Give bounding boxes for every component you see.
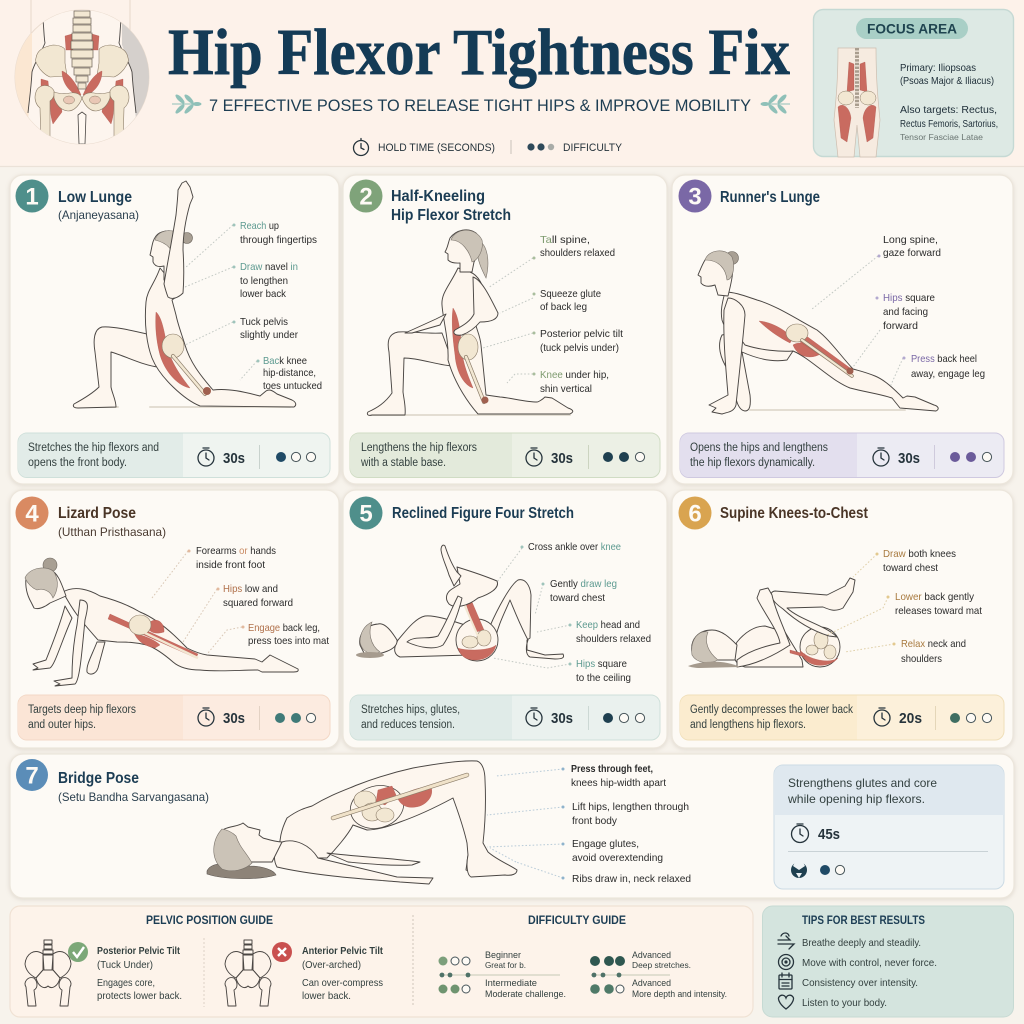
heading <box>58 189 139 222</box>
number badge 3 <box>678 180 712 212</box>
callouts: Hips square <box>883 292 935 304</box>
title: Hip Flexor Tightness Fix <box>168 16 790 89</box>
callouts: toes untucked <box>263 380 322 392</box>
heading: Bridge Pose <box>58 770 139 787</box>
summary bar <box>680 433 1004 478</box>
difficulty guide: DIFFICULTY GUIDE <box>528 915 626 927</box>
panel: tips for best results <box>762 906 1014 1017</box>
summary bar: 30s <box>551 711 573 727</box>
callouts <box>483 234 623 395</box>
icon: check <box>68 942 88 962</box>
callouts: forward <box>883 320 918 332</box>
difficulty guide: Advanced <box>632 978 671 989</box>
panel: focus area <box>814 10 1014 157</box>
summary bar: Gently decompresses the lower back <box>690 704 853 716</box>
figure: runner's lunge <box>698 251 938 414</box>
callouts: to lengthen <box>240 275 288 287</box>
callouts: inside front foot <box>196 559 265 571</box>
pelvic position guide: Engages core, <box>97 977 155 989</box>
icon: breath <box>778 933 794 949</box>
pelvic position guide: (Tuck Under) <box>97 959 153 971</box>
panel: focus area: Primary: Iliopsoas <box>900 62 976 74</box>
panel: focus area: Tensor Fasciae Latae <box>900 132 983 142</box>
callouts: Tall spine, <box>540 234 590 246</box>
callouts: Engage glutes, <box>572 838 639 850</box>
callouts: Lower back gently <box>895 591 975 603</box>
heading: (Utthan Pristhasana) <box>58 525 166 539</box>
icon: cross <box>272 942 292 962</box>
heading <box>58 770 209 804</box>
callouts: Knee under hip, <box>540 369 609 381</box>
callouts: avoid overextending <box>572 852 663 864</box>
panel: focus area: Also targets: Rectus, <box>900 104 997 116</box>
figure: half-kneeling stretch <box>367 230 573 415</box>
heading: (Anjaneyasana) <box>58 208 139 222</box>
callouts: shoulders relaxed <box>540 247 615 259</box>
summary bar: 30s <box>898 451 920 467</box>
callouts: Reach up <box>240 220 279 232</box>
summary bar <box>680 695 1004 740</box>
callouts: Forearms or hands <box>196 545 276 557</box>
number badge 7: 7 <box>25 762 39 790</box>
callouts: shoulders <box>901 653 942 665</box>
callouts: Posterior pelvic tilt <box>540 328 623 340</box>
callouts <box>827 548 982 665</box>
icon: calendar <box>779 973 792 989</box>
pelvic position guide: protects lower back. <box>97 990 182 1002</box>
callouts <box>493 541 651 684</box>
pelvic position guide: lower back. <box>302 990 351 1002</box>
heading: Supine Knees-to-Chest <box>720 505 868 522</box>
callouts: front body <box>572 815 618 827</box>
summary bar <box>350 433 660 478</box>
callouts: Tuck pelvis <box>240 316 288 328</box>
figure: reclined figure four <box>356 545 564 661</box>
heading: Lizard Pose <box>58 505 136 522</box>
callouts: away, engage leg <box>911 368 985 380</box>
summary bar: and outer hips. <box>28 719 96 731</box>
callouts: Engage back leg, <box>248 622 320 634</box>
summary bar <box>350 695 660 740</box>
pelvic position guide: Can over-compress <box>302 977 383 989</box>
heading <box>58 505 166 539</box>
panel: focus area: Rectus Femoris, Sartorius, <box>900 118 998 130</box>
number badge 4 <box>16 496 48 530</box>
subtitle with laurel icons: 7 EFFECTIVE POSES TO RELEASE TIGHT HIPS & IMPROVE MOBILITY <box>209 96 751 115</box>
callouts: shoulders relaxed <box>576 633 651 645</box>
callouts: Cross ankle over knee <box>528 541 621 553</box>
pelvic position guide <box>25 915 383 1007</box>
panel: pose 4 lizard pose <box>10 490 339 748</box>
callouts: (tuck pelvis under) <box>540 342 619 354</box>
callouts: squared forward <box>223 597 293 609</box>
page header background <box>0 0 1024 166</box>
number badge 6: 6 <box>688 500 702 528</box>
legend: hold time and difficulty <box>354 138 623 156</box>
icon: heart <box>779 995 793 1009</box>
callouts <box>185 220 322 392</box>
icon: neutral pelvis <box>25 940 71 1006</box>
callouts <box>487 763 691 885</box>
legend: hold time and difficulty: HOLD TIME (SECONDS) <box>378 142 495 154</box>
number badge 5 <box>350 496 382 530</box>
callouts: Gently draw leg <box>550 578 617 590</box>
callouts: and facing <box>883 306 928 318</box>
difficulty guide: Great for b. <box>485 960 526 970</box>
callouts: Hips square <box>576 658 627 670</box>
difficulty guide: Advanced <box>632 950 671 961</box>
summary bar: Stretches the hip flexors and <box>28 442 159 454</box>
callouts: Lift hips, lengthen through <box>572 801 689 813</box>
number badge 4: 4 <box>25 500 39 528</box>
callouts: Hips low and <box>223 583 278 595</box>
summary panel <box>774 765 1004 889</box>
pelvic position guide: Anterior Pelvic Tilt <box>302 945 383 957</box>
summary bar: with a stable base. <box>360 457 446 469</box>
summary bar <box>18 433 330 478</box>
callouts: Ribs draw in, neck relaxed <box>572 873 691 885</box>
callouts: gaze forward <box>883 247 941 259</box>
summary bar: Targets deep hip flexors <box>28 704 136 716</box>
heading: Reclined Figure Four Stretch <box>392 505 574 522</box>
summary bar <box>18 695 330 740</box>
callouts: toward chest <box>883 562 938 574</box>
figure: knees to chest <box>688 578 855 668</box>
summary bar: Stretches hips, glutes, <box>361 704 460 716</box>
figure: low lunge <box>73 181 296 408</box>
heading: (Setu Bandha Sarvangasana) <box>58 790 209 804</box>
pelvic position guide: Posterior Pelvic Tilt <box>97 945 180 957</box>
number badge 3: 3 <box>688 184 702 210</box>
callouts <box>812 234 985 387</box>
summary bar: 20s <box>899 711 922 727</box>
number badge 6 <box>678 496 712 530</box>
difficulty guide: Intermediate <box>485 978 537 989</box>
callouts: Long spine, <box>883 234 938 246</box>
panel: pose 5 reclined figure four <box>343 490 667 748</box>
callouts: of back leg <box>540 301 587 313</box>
anatomy illustration: pelvis <box>14 0 150 145</box>
callouts: press toes into mat <box>248 635 329 647</box>
summary bar: the hip flexors dynamically. <box>690 457 815 469</box>
summary bar: 30s <box>223 711 245 727</box>
number badge 1 <box>16 180 48 212</box>
panel: tips for best results: TIPS FOR BEST RESULTS <box>802 915 925 927</box>
panel: pelvic position and difficulty guides <box>10 906 753 1017</box>
figure: bridge pose <box>207 761 517 884</box>
heading: Hip Flexor Stretch <box>391 207 511 224</box>
legend: hold time and difficulty: DIFFICULTY <box>563 142 623 154</box>
panel: pose 1 low lunge <box>10 175 339 484</box>
callouts: slightly under <box>240 329 298 341</box>
summary bar: Lengthens the hip flexors <box>361 442 477 454</box>
panel: pose 6 supine knees-to-chest <box>672 490 1013 748</box>
panel: tips for best results: Consistency over intensity. <box>802 977 918 989</box>
summary bar: 30s <box>223 451 245 467</box>
difficulty guide: Beginner <box>485 950 521 961</box>
difficulty guide: More depth and intensity. <box>632 989 727 1000</box>
icon: target <box>778 954 794 970</box>
summary panel: 45s <box>818 827 840 843</box>
summary bar: opens the front body. <box>28 457 127 469</box>
panel: pose 2 half-kneeling <box>343 175 667 484</box>
callouts: hip-distance, <box>263 367 316 379</box>
heading: Low Lunge <box>58 189 132 206</box>
callouts: Draw both knees <box>883 548 956 560</box>
panel: pose 3 runner's lunge <box>672 175 1013 484</box>
callouts: releases toward mat <box>895 605 982 617</box>
figure: lizard pose <box>25 558 298 686</box>
panel: tips for best results: Move with control, never force. <box>802 957 937 969</box>
difficulty guide: Deep stretches. <box>632 960 691 970</box>
pelvic position guide: PELVIC POSITION GUIDE <box>146 915 273 927</box>
summary panel: Strengthens glutes and core <box>788 776 937 790</box>
icon: arched pelvis <box>225 940 271 1006</box>
callouts: shin vertical <box>540 383 592 395</box>
difficulty guide <box>438 915 727 1000</box>
callouts: knees hip-width apart <box>571 777 666 789</box>
heading <box>391 188 511 224</box>
callouts: Keep head and <box>576 619 640 631</box>
number badge 5: 5 <box>359 500 373 528</box>
summary bar: Opens the hips and lengthens <box>690 442 828 454</box>
number badge 2: 2 <box>359 184 373 210</box>
callouts: toward chest <box>550 592 605 604</box>
callouts: Back knee <box>263 355 307 367</box>
number badge 2 <box>350 180 382 212</box>
summary panel: while opening hip flexors. <box>787 792 925 806</box>
callouts: lower back <box>240 288 287 300</box>
difficulty guide: Moderate challenge. <box>485 989 566 1000</box>
number badge 1: 1 <box>25 184 39 210</box>
summary bar: and lengthens hip flexors. <box>690 719 806 731</box>
callouts: Squeeze glute <box>540 288 601 300</box>
summary bar: 30s <box>551 451 573 467</box>
pelvic position guide: (Over-arched) <box>302 959 361 971</box>
callouts: Press back heel <box>911 353 977 365</box>
panel: tips for best results: Breathe deeply and steadily. <box>802 937 921 949</box>
callouts: Press through feet, <box>571 763 653 775</box>
callouts: to the ceiling <box>576 672 631 684</box>
panel: focus area: FOCUS AREA <box>867 22 957 36</box>
heading: Runner's Lunge <box>720 189 820 206</box>
callouts: Relax neck and <box>901 638 966 650</box>
number badge 7 <box>16 759 48 791</box>
panel: focus area: (Psoas Major & Iliacus) <box>900 75 994 87</box>
callouts: through fingertips <box>240 234 317 246</box>
icon: lower-body anatomy <box>834 48 880 157</box>
heading: Half-Kneeling <box>391 188 485 205</box>
callouts <box>152 545 329 653</box>
panel: pose 7 bridge pose <box>10 754 1014 898</box>
callouts: Draw navel in <box>240 261 298 273</box>
panel: tips for best results: Listen to your body. <box>802 997 887 1009</box>
summary bar: and reduces tension. <box>361 719 455 731</box>
header <box>14 0 1014 157</box>
